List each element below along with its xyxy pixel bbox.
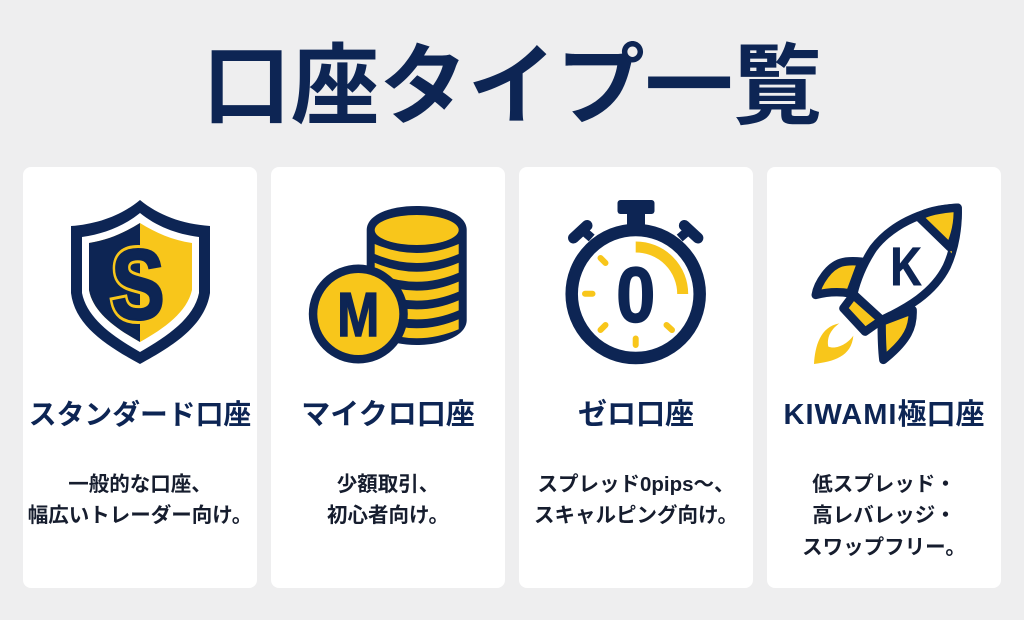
description: 高レバレッジ・: [812, 504, 956, 527]
icon: coins M: [308, 206, 467, 364]
title: 口座タイプ一覧: [202, 37, 822, 136]
panel: standard account: [23, 167, 257, 588]
description: 低スプレッド・: [812, 472, 956, 496]
description: [327, 472, 449, 527]
heading: スタンダード口座: [29, 398, 251, 430]
panel: zero account: [519, 167, 753, 588]
description: スキャルピング向け。: [534, 504, 738, 527]
icon: coins M: M: [337, 281, 379, 350]
description: 一般的な口座、: [68, 472, 212, 496]
icon: stopwatch 0: 0: [616, 250, 655, 338]
description: [802, 472, 966, 559]
panel: micro account: [271, 167, 505, 588]
icon: shield S: S: [111, 229, 165, 341]
icon: shield S: [71, 200, 210, 364]
description: 少額取引、: [337, 472, 439, 496]
panel: KIWAMI account: [767, 167, 1001, 588]
heading: KIWAMI極口座: [784, 398, 984, 430]
heading: マイクロ口座: [301, 398, 475, 430]
icon: rocket K: K: [890, 237, 922, 297]
description: [534, 472, 738, 527]
icon: stopwatch 0: [565, 200, 706, 364]
description: スプレッド0pips～、: [537, 472, 735, 496]
icon: rocket K: [812, 204, 962, 364]
description: [28, 472, 252, 527]
heading: ゼロ口座: [578, 398, 694, 430]
description: 初心者向け。: [327, 504, 449, 527]
description: 幅広いトレーダー向け。: [28, 504, 252, 527]
icon: shield S: S: [111, 229, 165, 341]
description: スワップフリー。: [802, 536, 966, 559]
